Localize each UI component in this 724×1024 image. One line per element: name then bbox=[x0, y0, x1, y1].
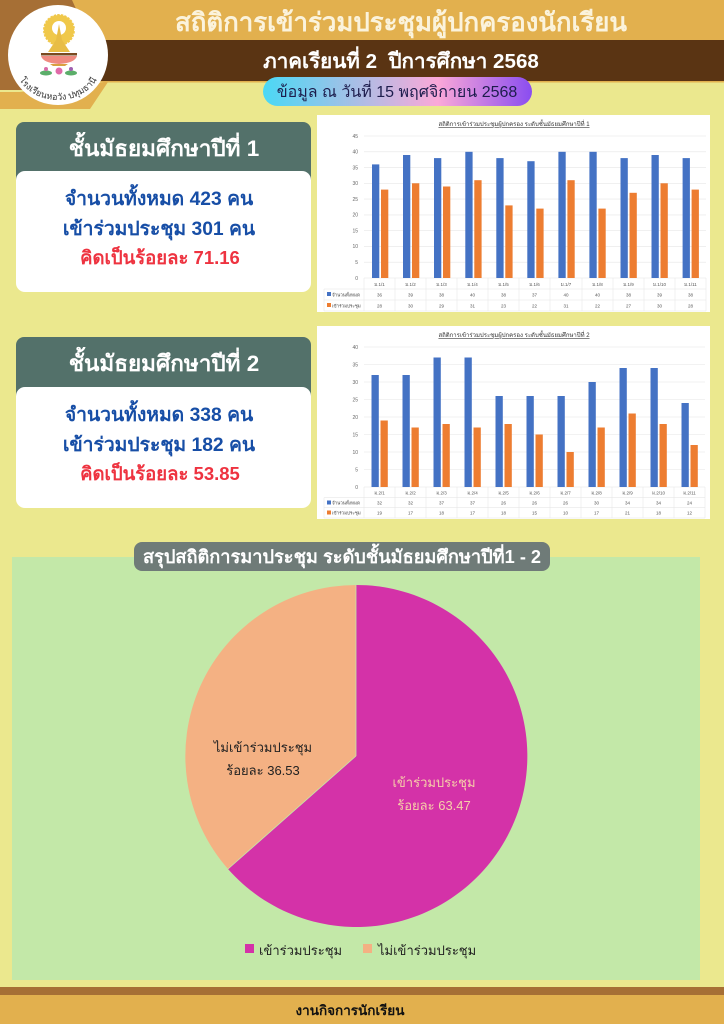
bar chart: grade 2: 40 bbox=[352, 345, 358, 351]
panel body: grade 1: จำนวนทั้งหมด 423 คน bbox=[65, 184, 254, 210]
bar chart: grade 1: 28 bbox=[688, 304, 693, 308]
panel body: grade 2: เข้าร่วมประชุม 182 คน bbox=[63, 434, 256, 457]
icon: school logo: โรงเรียนหอวัง ปทุมธานี bbox=[20, 76, 96, 100]
bar chart: grade 1: 45 bbox=[352, 134, 358, 140]
bar chart: grade 1: 31 bbox=[470, 304, 475, 308]
bar chart: grade 2: 30 bbox=[352, 380, 358, 386]
bar chart: grade 1: 30 bbox=[352, 181, 358, 187]
bar chart: grade 2: 17 bbox=[408, 510, 413, 516]
bar chart: grade 2: 18 bbox=[439, 510, 444, 516]
bar chart: grade 2: 26 bbox=[501, 500, 506, 506]
bar chart: grade 2: 19 bbox=[377, 510, 382, 516]
bar chart: grade 2: 20 bbox=[352, 415, 358, 421]
bar chart: grade 1: 38 bbox=[626, 292, 631, 298]
bar chart: grade 1: 36 bbox=[377, 292, 382, 298]
bar chart: grade 2: ม.2/2 bbox=[405, 490, 416, 496]
pie chart bbox=[185, 585, 527, 927]
pie label: not attended bbox=[213, 740, 312, 778]
bar chart: grade 2: 35 bbox=[352, 362, 358, 368]
subtitle: ภาคเรียนที่ 2 ปีการศึกษา 2568 bbox=[263, 46, 539, 73]
panel header: grade 1: ชั้นมัธยมศึกษาปีที่ 1 bbox=[69, 131, 259, 161]
pie label: attended: เข้าร่วมประชุม bbox=[392, 775, 476, 791]
summary heading bbox=[134, 542, 550, 571]
bar chart: grade 2: 34 bbox=[656, 500, 661, 506]
bar chart: grade 1: 22 bbox=[532, 304, 537, 308]
bar chart: grade 1: 39 bbox=[657, 292, 662, 298]
bar chart: grade 2: ม.2/3 bbox=[436, 490, 447, 496]
bar chart: grade 2: 12 bbox=[687, 510, 692, 516]
bar chart: grade 2: 32 bbox=[408, 500, 413, 506]
bar chart: grade 1: ม.1/2 bbox=[405, 282, 416, 287]
panel header: grade 2 bbox=[16, 337, 311, 396]
pie label: not attended: ร้อยละ 36.53 bbox=[226, 763, 300, 778]
title: สถิติการเข้าร่วมประชุมผู้ปกครองนักเรียน bbox=[175, 8, 627, 39]
bar chart: grade 1: เข้าร่วมประชุม bbox=[332, 304, 361, 310]
panel body: grade 2 bbox=[16, 387, 311, 508]
pie label: attended bbox=[392, 775, 476, 813]
bar chart: grade 2: 5 bbox=[355, 468, 358, 474]
bar chart: grade 1: 39 bbox=[408, 292, 413, 298]
panel: grade 2 summary bbox=[16, 337, 311, 508]
panel: grade 1 summary bbox=[16, 122, 311, 292]
bar chart: grade 1: 0 bbox=[355, 276, 358, 282]
bar chart: grade 2: เข้าร่วมประชุม bbox=[332, 510, 361, 516]
bar chart: grade 1: 30 bbox=[408, 304, 413, 308]
bar chart: grade 1 bbox=[317, 115, 710, 312]
bar chart: grade 2 bbox=[317, 326, 710, 519]
bar chart: grade 2: ม.2/8 bbox=[591, 490, 602, 496]
bar chart: grade 2: 34 bbox=[625, 500, 630, 506]
bar chart: grade 2: ม.2/11 bbox=[683, 490, 696, 496]
bar chart: grade 2: 10 bbox=[563, 510, 568, 516]
bar chart: grade 1: ม.1/10 bbox=[653, 282, 666, 287]
bar chart: grade 2: 10 bbox=[352, 450, 358, 456]
bar chart: grade 1: 37 bbox=[532, 292, 537, 298]
legend bbox=[245, 943, 476, 959]
bar chart: grade 1: 38 bbox=[439, 292, 444, 298]
bar chart: grade 1: 23 bbox=[501, 304, 506, 308]
bar chart: grade 1: 22 bbox=[595, 304, 600, 308]
bar chart: grade 1: ม.1/11 bbox=[684, 282, 697, 287]
footer: งานกิจการนักเรียน bbox=[296, 1003, 405, 1018]
bar chart: grade 2: 17 bbox=[594, 510, 599, 516]
bar chart: grade 2: 37 bbox=[439, 500, 444, 506]
bar chart: grade 1: 10 bbox=[352, 244, 358, 250]
bar chart: grade 1: 27 bbox=[626, 304, 631, 308]
panel header: grade 1 bbox=[16, 122, 311, 180]
panel body: grade 2: จำนวนทั้งหมด 338 คน bbox=[65, 400, 254, 426]
bar chart: grade 1: 29 bbox=[439, 304, 444, 308]
bar chart: grade 1: 38 bbox=[501, 292, 506, 298]
panel body: grade 1 bbox=[16, 171, 311, 292]
panel: summary background bbox=[12, 557, 700, 980]
date pill: ข้อมูล ณ วันที่ 15 พฤศจิกายน 2568 bbox=[277, 80, 517, 102]
bar chart: grade 2: ม.2/9 bbox=[622, 490, 633, 496]
bar chart: grade 1: ม.1/8 bbox=[592, 282, 603, 287]
legend: ไม่เข้าร่วมประชุม bbox=[377, 943, 476, 959]
bar chart: grade 1: 40 bbox=[470, 292, 475, 298]
bar chart: grade 1: 5 bbox=[355, 260, 358, 266]
bar chart: grade 2: ม.2/10 bbox=[652, 490, 665, 496]
bar chart: grade 1: ม.1/6 bbox=[529, 282, 540, 287]
bar chart: grade 1: ม.1/4 bbox=[467, 282, 478, 287]
bar chart: grade 1: 15 bbox=[352, 228, 358, 234]
panel header: grade 2: ชั้นมัธยมศึกษาปีที่ 2 bbox=[69, 346, 259, 376]
bar chart: grade 2: ม.2/7 bbox=[560, 490, 571, 496]
bar chart: grade 1: 40 bbox=[595, 292, 600, 298]
panel body: grade 2: คิดเป็นร้อยละ 53.85 bbox=[80, 461, 240, 484]
footer bbox=[0, 987, 724, 1024]
bar chart: grade 1: 40 bbox=[352, 150, 358, 156]
bar chart: grade 2: 30 bbox=[594, 500, 599, 506]
bar chart: grade 2: 18 bbox=[501, 510, 506, 516]
bar chart: grade 1: ม.1/1 bbox=[374, 282, 385, 287]
bar chart: grade 1: จำนวนทั้งหมด bbox=[332, 292, 360, 298]
bar chart: grade 2: 17 bbox=[470, 510, 475, 516]
bar chart: grade 2: 0 bbox=[355, 485, 358, 491]
bar chart: grade 2: 32 bbox=[377, 500, 382, 506]
bar chart: grade 2: 21 bbox=[625, 510, 630, 516]
bar chart: grade 2: จำนวนทั้งหมด bbox=[332, 500, 360, 506]
bar chart: grade 2: ม.2/5 bbox=[498, 490, 509, 496]
bar chart: grade 2: 15 bbox=[352, 432, 358, 438]
panel body: grade 1: คิดเป็นร้อยละ 71.16 bbox=[80, 245, 240, 268]
summary heading: สรุปสถิติการมาประชุม ระดับชั้นมัธยมศึกษาปีที่1 - 2 bbox=[143, 543, 541, 569]
pie label: not attended: ไม่เข้าร่วมประชุม bbox=[213, 740, 312, 756]
bar chart: grade 1: 31 bbox=[563, 304, 569, 308]
panel body: grade 1: เข้าร่วมประชุม 301 คน bbox=[63, 218, 256, 241]
bar chart: grade 1: ม.1/9 bbox=[623, 282, 634, 287]
bar chart: grade 2: 26 bbox=[532, 500, 537, 506]
bar chart: grade 2: ม.2/6 bbox=[529, 490, 540, 496]
bar chart: grade 1: ม.1/7 bbox=[561, 282, 572, 287]
bar chart: grade 2: ม.2/4 bbox=[467, 490, 478, 496]
bar chart: grade 2: 18 bbox=[656, 510, 661, 516]
bar chart: grade 2: ม.2/1 bbox=[374, 490, 385, 496]
bar chart: grade 2: 26 bbox=[563, 500, 568, 506]
bar chart: grade 2: 37 bbox=[470, 500, 475, 506]
bar chart: grade 1: 25 bbox=[352, 197, 358, 203]
bar chart: grade 1: ม.1/3 bbox=[436, 282, 447, 287]
bar chart: grade 1: สถิติการเข้าร่วมประชุมผู้ปกครอง ระดับชั้นมัธยมศึกษาปีที่ 1 bbox=[438, 118, 590, 128]
legend: เข้าร่วมประชุม bbox=[259, 943, 342, 959]
pie label: attended: ร้อยละ 63.47 bbox=[397, 798, 471, 813]
bar chart: grade 1: 28 bbox=[377, 304, 382, 308]
bar chart: grade 1: 40 bbox=[563, 292, 569, 298]
date pill bbox=[263, 77, 532, 106]
bar chart: grade 1: 30 bbox=[657, 304, 662, 308]
bar chart: grade 1: ม.1/5 bbox=[498, 282, 509, 287]
bar chart: grade 2: 15 bbox=[532, 510, 537, 516]
icon: school logo bbox=[8, 5, 108, 105]
bar chart: grade 1: 20 bbox=[352, 213, 358, 219]
bar chart: grade 2: สถิติการเข้าร่วมประชุมผู้ปกครอง ระดับชั้นมัธยมศึกษาปีที่ 2 bbox=[438, 329, 590, 339]
bar chart: grade 1: 38 bbox=[688, 292, 693, 298]
header band bbox=[0, 0, 724, 109]
bar chart: grade 2: 25 bbox=[352, 398, 358, 404]
bar chart: grade 1: 35 bbox=[352, 165, 358, 171]
bar chart: grade 2: 24 bbox=[687, 500, 692, 506]
